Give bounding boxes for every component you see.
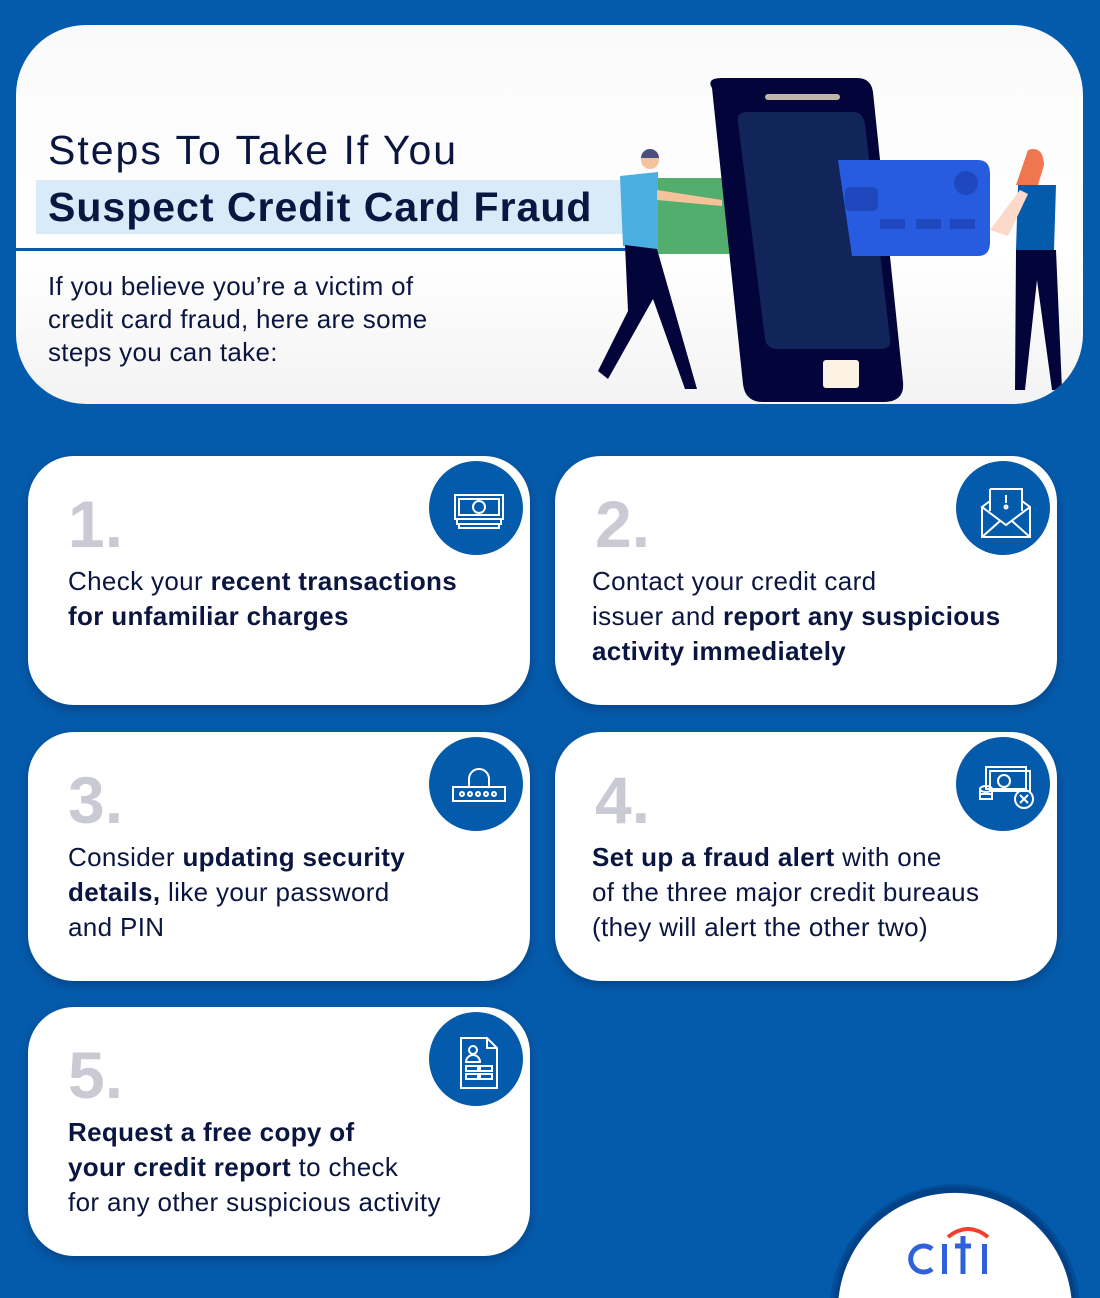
text 5: Request a free copy of <box>68 1117 355 1147</box>
number 4: 4. <box>595 763 650 837</box>
text 2: activity immediately <box>592 636 846 666</box>
text 5: your credit report to check <box>68 1152 398 1182</box>
number 5: 5. <box>68 1038 123 1112</box>
text 1: Check your recent transactions <box>68 566 457 596</box>
text 5: for any other suspicious activity <box>68 1187 441 1217</box>
text 3: and PIN <box>68 912 164 942</box>
text 4: Set up a fraud alert with one <box>592 842 942 872</box>
card 2 <box>555 456 1057 705</box>
number 1: 1. <box>68 487 123 561</box>
text 3: details, like your password <box>68 877 390 907</box>
intro text: steps you can take: <box>48 337 278 367</box>
icon: lock password <box>426 734 526 834</box>
intro text: credit card fraud, here are some <box>48 304 428 334</box>
text 3: Consider updating security <box>68 842 405 872</box>
text 2: Contact your credit card <box>592 566 876 596</box>
icon: credit report <box>426 1009 526 1109</box>
icon: envelope alert <box>953 458 1053 558</box>
card 3 <box>28 732 530 981</box>
text 3 <box>68 842 405 942</box>
number 3: 3. <box>68 763 123 837</box>
icon: cash <box>426 458 526 558</box>
citi logo <box>911 1229 988 1274</box>
title line 2 highlighted: Suspect Credit Card Fraud <box>48 184 592 230</box>
header panel <box>16 25 1083 404</box>
text 5 <box>68 1117 441 1217</box>
card 4 <box>555 732 1057 981</box>
card 1 <box>28 456 530 705</box>
title line 1: Steps To Take If You <box>48 127 458 173</box>
citi logo badge <box>830 1184 1080 1298</box>
number 2: 2. <box>595 487 650 561</box>
text 2 <box>592 566 1001 666</box>
text 4 <box>592 842 979 942</box>
text 1: for unfamiliar charges <box>68 601 349 631</box>
card 5 <box>28 1007 530 1256</box>
illustration: phone with people and card <box>598 78 1062 402</box>
text 1 <box>68 566 457 631</box>
intro text <box>48 271 428 367</box>
intro text: If you believe you’re a victim of <box>48 271 413 301</box>
text 4: (they will alert the other two) <box>592 912 928 942</box>
icon: cash cancel <box>953 734 1053 834</box>
text 4: of the three major credit bureaus <box>592 877 979 907</box>
text 2: issuer and report any suspicious <box>592 601 1001 631</box>
